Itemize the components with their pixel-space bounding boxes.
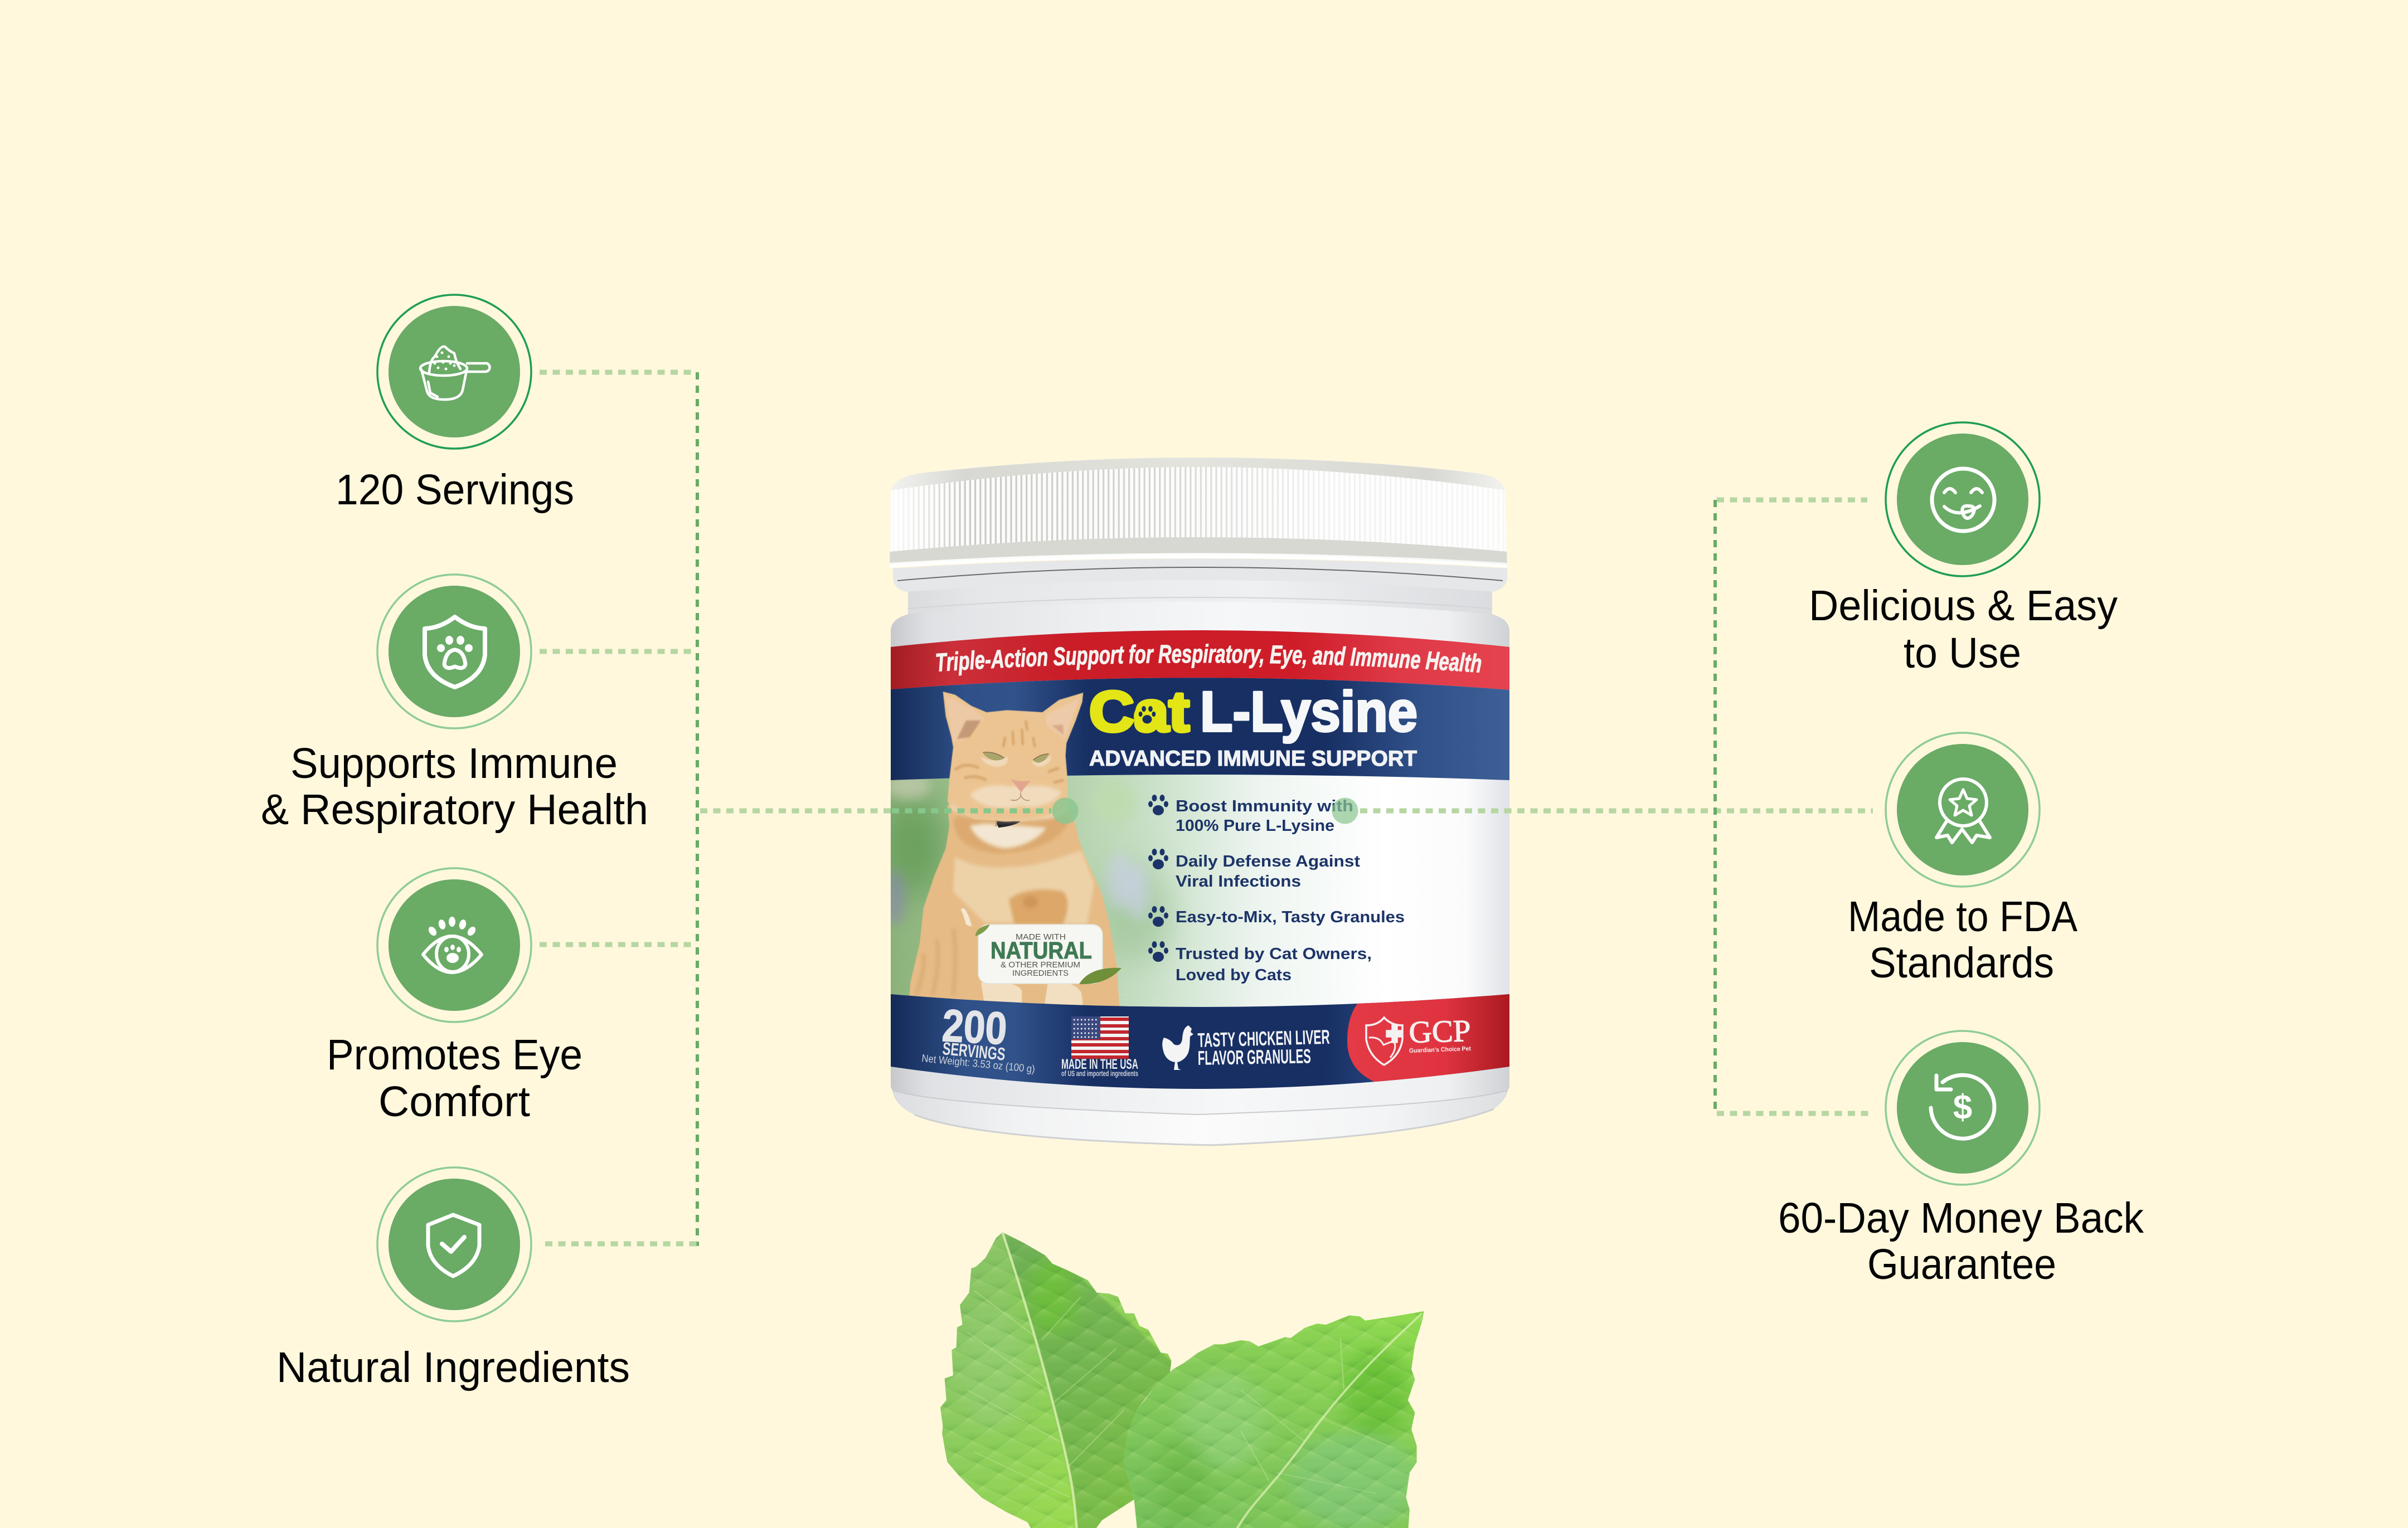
feature: Supports Immune & Respiratory Health [261,575,648,834]
feature: Supports Immune & Respiratory Health: & Respiratory Health [261,786,648,834]
GCP logo [1366,1014,1471,1065]
jar base [893,1091,1507,1145]
product jar [890,458,1509,1146]
feature: Promotes Eye Comfort [327,868,582,1126]
icon: paw shield [377,575,531,728]
icon: chicken [1162,1025,1193,1070]
right connectors [1715,500,1873,1115]
left connectors [540,372,697,1246]
cat eyes [983,752,1049,763]
badge leaves [975,924,1122,984]
feature: Promotes Eye Comfort: Promotes Eye [327,1031,582,1079]
feature: Delicious & Easy to Use: Delicious & Easy [1809,582,2118,630]
icon: money back arrow [1886,1031,2040,1185]
benefit bullets on label: Viral Infections [1176,873,1301,890]
natural ingredients badge: INGREDIENTS [1012,969,1069,978]
chicken flavor: TASTY CHICKEN LIVER [1197,1025,1330,1052]
bullet paw 4 [1148,941,1168,962]
benefit bullets on label [1148,795,1405,984]
cheeks and muzzle [949,756,1069,821]
feature: Promotes Eye Comfort: Comfort [378,1078,530,1126]
natural ingredients badge: & OTHER PREMIUM [1001,960,1080,970]
cat head [943,692,1083,821]
ears [946,695,1080,741]
GCP red panel [1347,986,1509,1087]
servings block: SERVINGS [941,1038,1006,1064]
feature: Made to FDA Standards [1848,733,2078,987]
background meadow [881,772,1171,964]
product title: ADVANCED IMMUNE SUPPORT [1089,747,1417,771]
icon: award ribbon [1886,733,2040,887]
chicken flavor: FLAVOR GRANULES [1197,1044,1311,1069]
face markings [955,721,1064,782]
USA flag and text: MADE IN THE USA [1061,1057,1138,1072]
product title [1089,680,1417,771]
feature: Made to FDA Standards: Standards [1869,939,2054,987]
USA flag and text: of US and imported ingredients [1061,1069,1138,1078]
icon: money back arrow: $ [1953,1088,1972,1127]
left leaf [931,1229,1180,1528]
benefit bullets on label: Easy-to-Mix, Tasty Granules [1176,908,1405,926]
servings block: 200 [941,1000,1008,1054]
feature: Made to FDA Standards: Made to FDA [1848,893,2078,941]
red band tagline: Triple-Action Support for Respiratory, Eye, and Immune Health [936,644,1482,675]
navy title band [891,678,1509,780]
bullet paw 1 [1148,795,1168,815]
feature: Delicious & Easy to Use [1809,422,2118,677]
bullet paw 3 [1148,906,1168,927]
benefit bullets on label: 100% Pure L-Lysine [1176,817,1334,835]
natural ingredients badge: NATURAL [991,937,1092,964]
feature: Delicious & Easy to Use: to Use [1904,629,2021,677]
red top band [891,630,1509,690]
servings block: Net Weight: 3.53 oz (100 g) [921,1053,1036,1076]
feature: 120 Servings: 120 Servings [336,466,574,514]
icon: scoop [377,295,531,449]
cat body [909,805,1119,1007]
benefit bullets on label: Trusted by Cat Owners, [1176,945,1372,963]
jar body [891,602,1509,1145]
lower navy band [891,986,1509,1120]
jar lid [890,458,1507,567]
USA flag and text [1061,1016,1138,1078]
paw in Cat logo [1134,702,1163,731]
infographic canvas [262,294,2144,1528]
benefit bullets on label: Daily Defense Against [1176,853,1360,870]
feature: 60-Day Money Back Guarantee [1778,1031,2144,1288]
feature: 60-Day Money Back Guarantee: Guarantee [1867,1240,2056,1288]
bullet paw 2 [1148,849,1168,869]
product title: L-Lysine [1200,680,1417,743]
collar [995,820,1021,828]
right leaf [1116,1307,1436,1528]
icon: GCP shield [1366,1018,1402,1065]
chicken flavor [1162,1025,1330,1070]
icon: shield check [377,1167,531,1321]
feature: Natural Ingredients: Natural Ingredients [276,1344,630,1391]
natural ingredients badge: MADE WITH [1016,932,1066,942]
icon: eye with paw [377,868,531,1022]
benefit bullets on label: Boost Immunity with [1176,797,1353,815]
nose and mouth [1011,779,1030,792]
center connector through jar [700,798,1873,824]
product title: Cat [1089,680,1190,743]
GCP logo: Guardian's Choice Pet [1409,1045,1471,1054]
feature: 60-Day Money Back Guarantee: 60-Day Money Back [1778,1194,2144,1242]
feature: 120 Servings [336,295,574,514]
photo panel with cat [881,769,1509,1020]
GCP logo: GCP [1409,1014,1471,1050]
natural ingredients badge [975,924,1122,984]
connector lines [540,372,1873,1246]
leaves at bottom [931,1229,1436,1528]
flag [1071,1016,1129,1059]
icon: smiling face [1886,422,2040,576]
feature: Natural Ingredients [276,1167,630,1391]
servings block [921,1000,1036,1076]
jar neck and flange [893,558,1507,624]
feature: Supports Immune & Respiratory Health: Supports Immune [290,739,618,787]
benefit bullets on label: Loved by Cats [1176,966,1292,984]
